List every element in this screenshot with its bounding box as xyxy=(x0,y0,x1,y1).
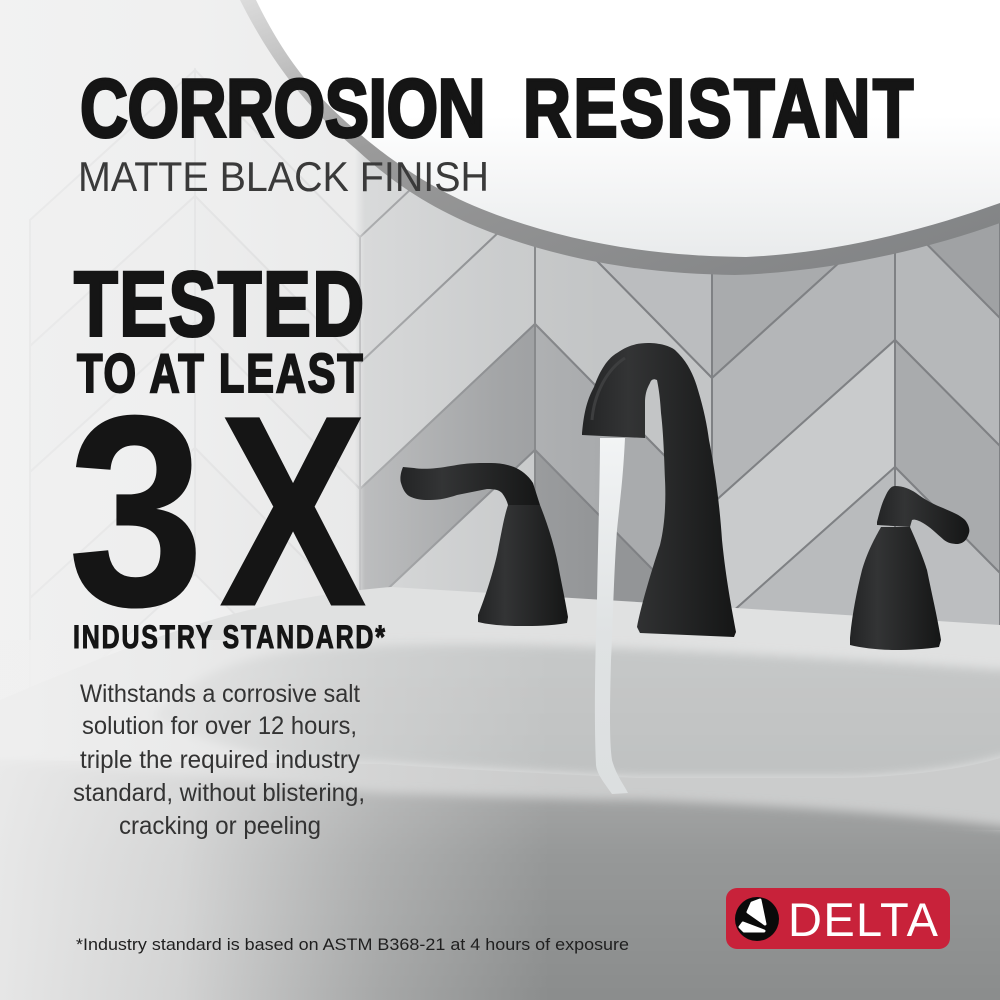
subtitle: MATTE BLACK FINISH xyxy=(78,153,489,200)
description text: solution for over 12 hours, xyxy=(82,712,357,740)
callout: tested to at least 3X: X xyxy=(219,358,367,663)
Delta logo: DELTA xyxy=(788,893,939,946)
description text: Withstands a corrosive salt xyxy=(80,680,360,708)
callout: tested to at least 3X xyxy=(68,253,386,663)
callout: tested to at least 3X: TO AT LEAST xyxy=(77,344,363,404)
right handle xyxy=(850,486,969,650)
description text: cracking or peeling xyxy=(119,812,321,840)
sink counter and basin xyxy=(0,587,1000,830)
front countertop fading to grey xyxy=(0,760,1000,1000)
callout: tested to at least 3X: TESTED xyxy=(74,253,364,356)
title: RESISTANT xyxy=(523,61,913,154)
description text: standard, without blistering, xyxy=(73,779,365,807)
water stream xyxy=(595,438,628,794)
faucet spout xyxy=(582,343,736,637)
title: CORROSION xyxy=(80,61,486,154)
description text xyxy=(73,680,365,840)
title xyxy=(80,61,913,154)
tiled wall background xyxy=(0,0,1000,757)
description text: triple the required industry xyxy=(80,746,360,774)
left handle xyxy=(400,463,568,626)
left light overlay on lower area xyxy=(0,640,1000,1000)
callout: tested to at least 3X: INDUSTRY STANDARD* xyxy=(73,620,386,656)
round mirror with grey rim xyxy=(240,0,1000,275)
footnote: *Industry standard is based on ASTM B368-21 at 4 hours of exposure xyxy=(76,935,629,954)
Delta logo xyxy=(726,888,950,949)
callout: tested to at least 3X: 3 xyxy=(68,359,204,663)
